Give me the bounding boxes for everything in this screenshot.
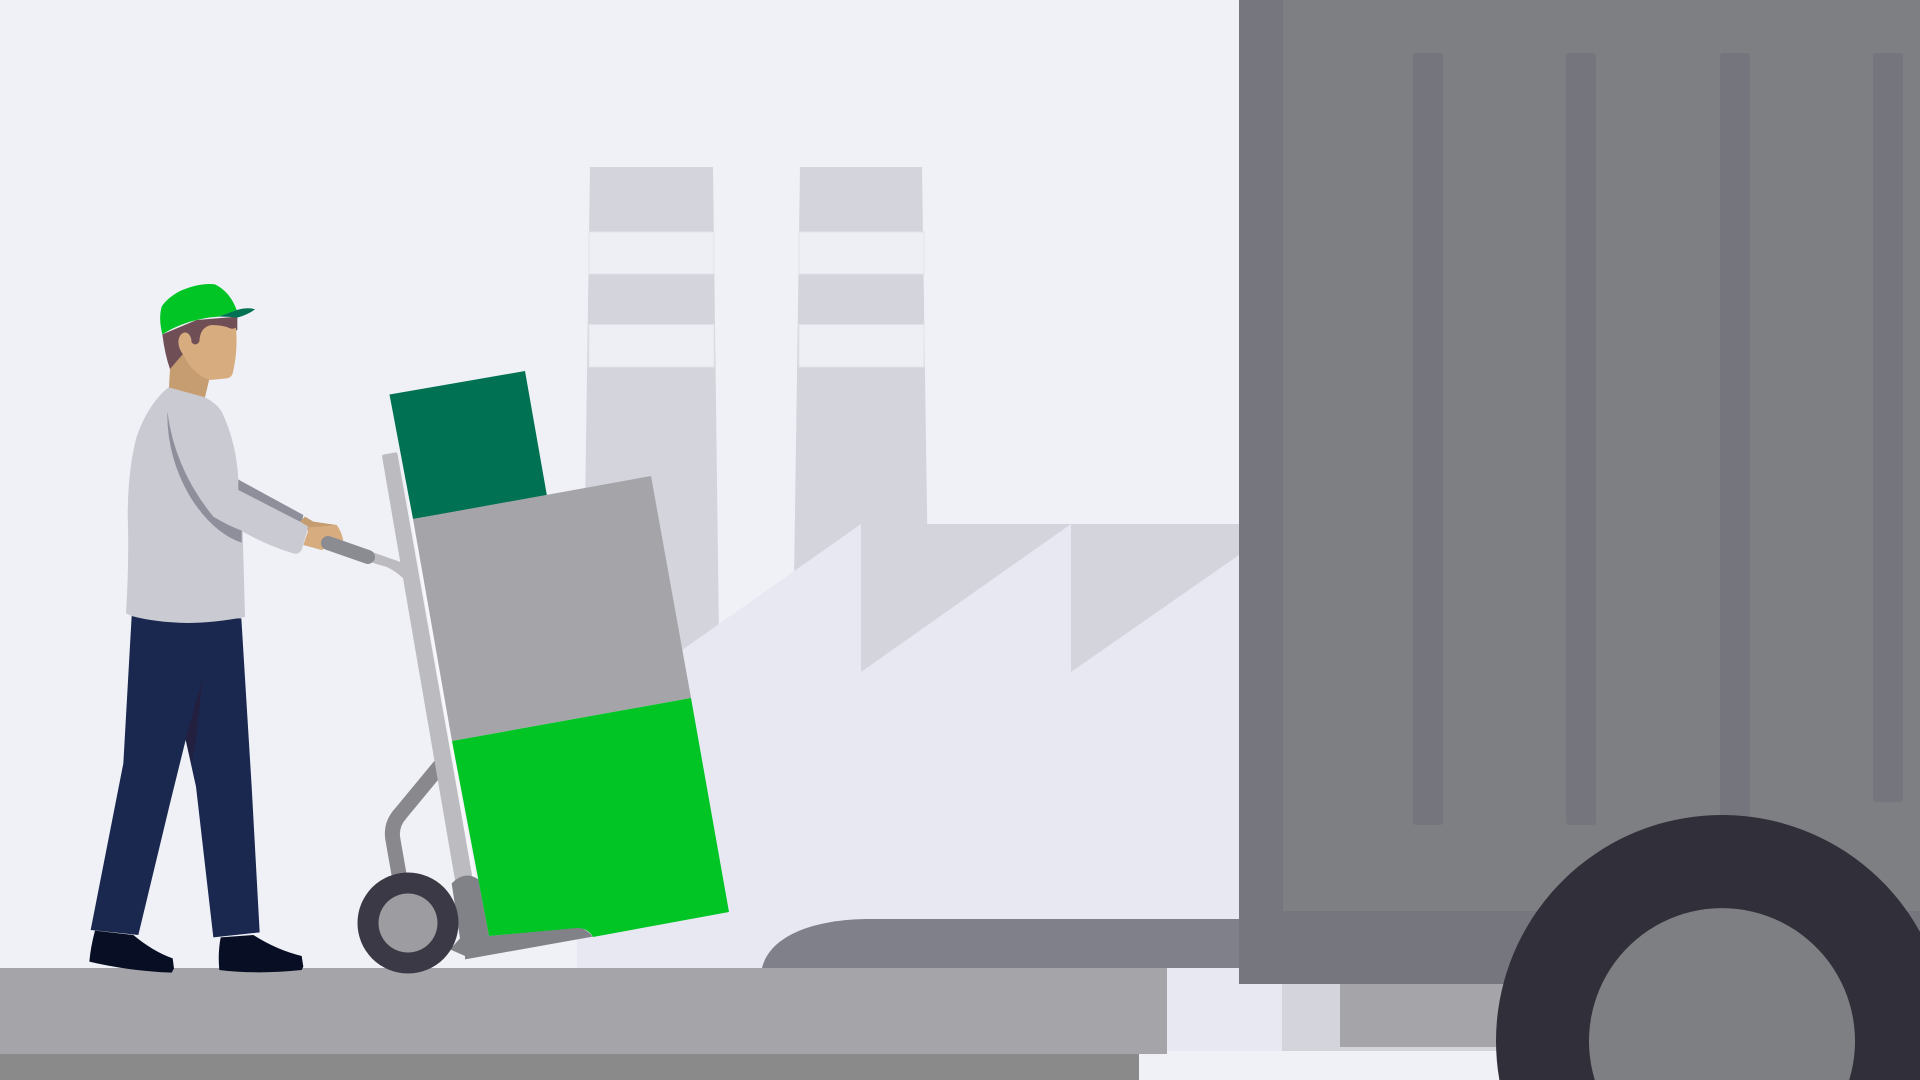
hand truck grip <box>328 543 368 557</box>
foot plate <box>450 875 593 959</box>
factory chimney right <box>792 167 930 720</box>
back arm <box>237 479 303 523</box>
cap <box>160 284 237 334</box>
back hand <box>300 517 343 540</box>
shirt <box>126 387 308 623</box>
dock platform <box>0 968 1167 1080</box>
hand truck wheel <box>358 872 458 974</box>
brace <box>392 761 444 880</box>
truck rib 3 <box>1720 53 1750 825</box>
pole highlight <box>408 500 476 880</box>
under-truck fill <box>1167 968 1540 1051</box>
truck wheel <box>1496 815 1920 1080</box>
loading ramp <box>762 919 1239 969</box>
factory chimney left <box>582 167 720 720</box>
truck rib 4 <box>1873 53 1903 802</box>
hair <box>162 317 237 369</box>
head <box>160 284 255 397</box>
left shoe <box>89 931 174 973</box>
handle arm <box>372 552 405 580</box>
box: bright green bottom <box>452 698 729 937</box>
truck body <box>1239 0 1920 984</box>
hand truck frame <box>358 452 593 973</box>
truck rib 1 <box>1413 53 1443 825</box>
factory front sawtooth roof <box>577 524 1282 1051</box>
face <box>178 325 237 380</box>
truck rib 2 <box>1566 53 1596 825</box>
box: grey middle <box>413 476 691 741</box>
shirt fold <box>167 412 242 543</box>
legs <box>89 616 303 973</box>
pole <box>382 452 473 880</box>
upper body <box>126 387 343 623</box>
cap brim <box>218 308 255 318</box>
trouser shadow <box>186 678 203 763</box>
front hand <box>303 525 343 550</box>
neck <box>169 350 209 397</box>
box: dark green top <box>390 371 547 519</box>
worker <box>89 284 343 973</box>
right shoe <box>219 935 303 972</box>
factory back wall <box>927 524 1239 724</box>
